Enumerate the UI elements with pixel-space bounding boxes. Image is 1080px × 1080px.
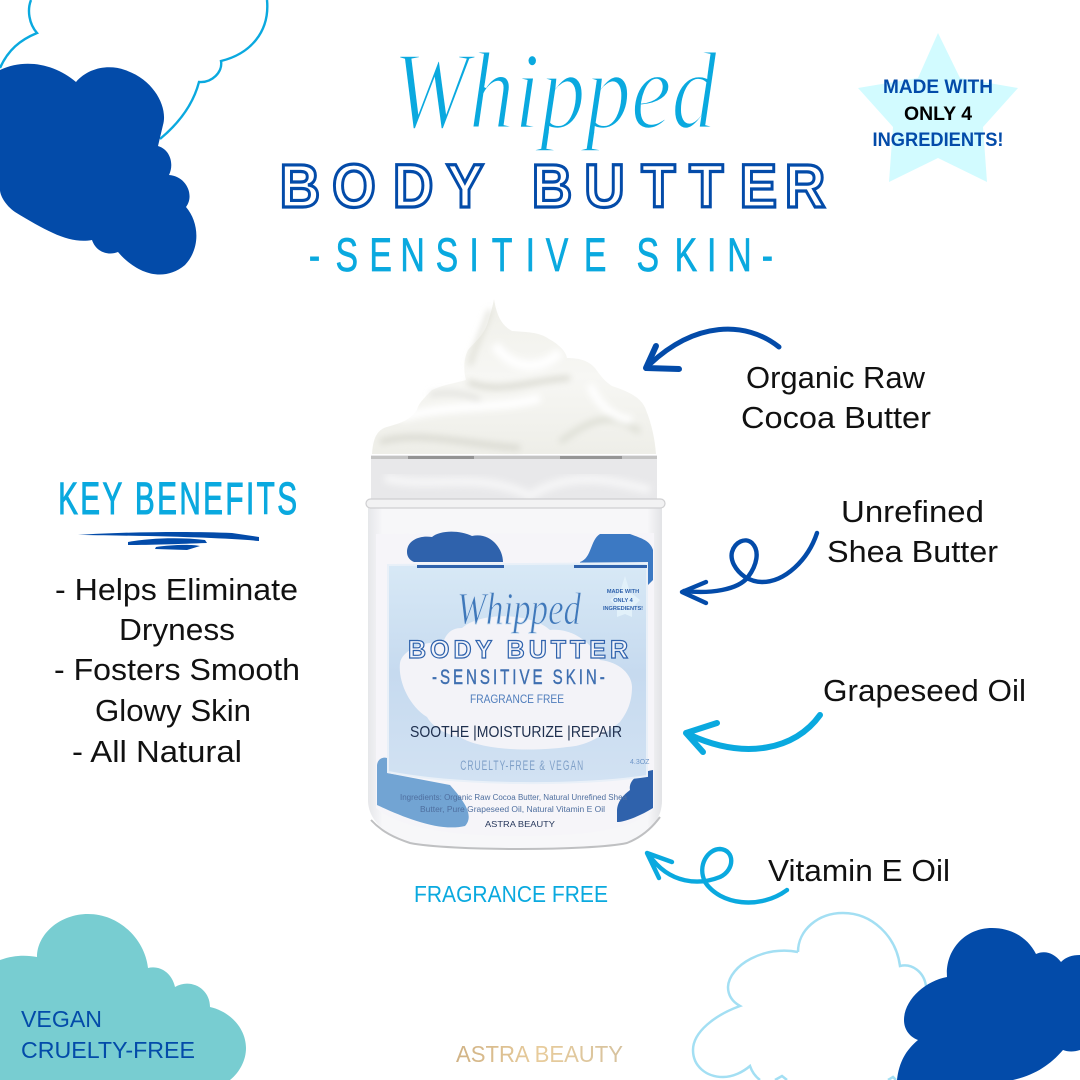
- label: mini badge text: INGREDIENTS!: [603, 606, 643, 612]
- benefits list: Dryness: [119, 612, 235, 647]
- cloud outline: top left: [0, 0, 267, 139]
- label: top right cloud: [580, 534, 653, 585]
- benefits list: [54, 572, 300, 769]
- ingredient label: shea butter: [827, 494, 998, 569]
- label: top left cloud: [407, 532, 503, 562]
- benefits list: - All Natural: [72, 734, 242, 769]
- label: brand: ASTRA BEAUTY: [485, 819, 555, 829]
- badge: made with only 4 ingredients star: [858, 33, 1018, 182]
- caption: vegan cruelty-free: VEGAN: [21, 1006, 102, 1032]
- label: white cloud: [400, 616, 632, 750]
- arrow: vitamin e oil: [647, 849, 787, 902]
- title: Whipped: Whipped: [393, 30, 718, 152]
- brush underline: [78, 532, 259, 550]
- label: BODY BUTTER: BODY BUTTER: [408, 636, 628, 664]
- label: soothe moisturize repair: SOOTHE |MOISTURIZE |REPAIR: [410, 724, 622, 741]
- cloud outline: bottom right: [693, 913, 926, 1080]
- ingredient label: shea butter: Unrefined: [841, 494, 984, 529]
- label: bottom right cloud: [617, 770, 653, 822]
- label: net weight: 4.3OZ: [630, 759, 650, 766]
- arrow: grapeseed oil: [686, 715, 820, 752]
- label: mini badge text: [603, 589, 643, 612]
- product jar: [366, 299, 665, 849]
- label: mini badge text: MADE WITH: [607, 589, 639, 595]
- ingredient label: cocoa butter: Organic Raw: [746, 360, 926, 395]
- arrow: cocoa butter: [646, 329, 779, 369]
- jar: label: [376, 532, 654, 836]
- label: ingredients: Ingredients: Organic Raw Cocoa Butter, Natural Unrefined Shea: [400, 793, 628, 802]
- jar: label: Butter, Pure Grapeseed Oil, Natural Vitamin E Oil: [420, 805, 605, 814]
- title: BODY BUTTER: BODY BUTTER: [280, 153, 825, 221]
- benefits list: - Helps Eliminate: [55, 572, 298, 607]
- ingredient label: cocoa butter: [741, 360, 931, 435]
- subtitle: SENSITIVE SKIN: -SENSITIVE SKIN-: [309, 229, 773, 281]
- badge: made with only 4 ingredients star: ONLY 4: [904, 104, 972, 125]
- cloud: bottom right dark: [897, 928, 1080, 1080]
- jar: rim: [366, 499, 665, 508]
- label: bottom left cloud: [377, 758, 469, 827]
- label: panel: [388, 563, 647, 783]
- label: mini star: [610, 576, 640, 617]
- jar: whipped cream: [372, 299, 656, 454]
- heading: key benefits: KEY BENEFITS: [58, 474, 297, 525]
- label: SENSITIVE SKIN: -SENSITIVE SKIN-: [432, 664, 605, 689]
- ingredient label: shea butter: Shea Butter: [827, 534, 998, 569]
- badge: made with only 4 ingredients star: INGREDIENTS!: [872, 130, 1004, 151]
- caption: vegan cruelty-free: CRUELTY-FREE: [21, 1037, 195, 1063]
- jar: neck band: [371, 455, 657, 500]
- benefits list: - Fosters Smooth: [54, 652, 300, 687]
- arrow: shea butter: [682, 533, 817, 603]
- caption: vegan cruelty-free: [21, 1006, 195, 1063]
- caption: fragrance free: FRAGRANCE FREE: [414, 881, 608, 907]
- ingredient label: cocoa butter: Cocoa Butter: [741, 400, 931, 435]
- label: mini badge text: ONLY 4: [613, 598, 634, 604]
- brand: astra beauty: ASTRA BEAUTY: [456, 1041, 623, 1067]
- ingredient label: vitamin e oil: Vitamin E Oil: [768, 853, 950, 888]
- label: FRAGRANCE FREE: FRAGRANCE FREE: [470, 694, 564, 706]
- benefits list: Glowy Skin: [95, 693, 251, 728]
- jar: glass body: [368, 506, 662, 849]
- badge: made with only 4 ingredients star: MADE WITH: [883, 77, 993, 98]
- cloud: top left dark: [0, 64, 196, 275]
- ingredient label: grapeseed oil: Grapeseed Oil: [823, 673, 1026, 708]
- cloud: bottom left teal: [0, 914, 246, 1080]
- label: Whipped: Whipped: [457, 583, 582, 634]
- label: cruelty-free vegan: CRUELTY-FREE & VEGAN: [460, 759, 583, 774]
